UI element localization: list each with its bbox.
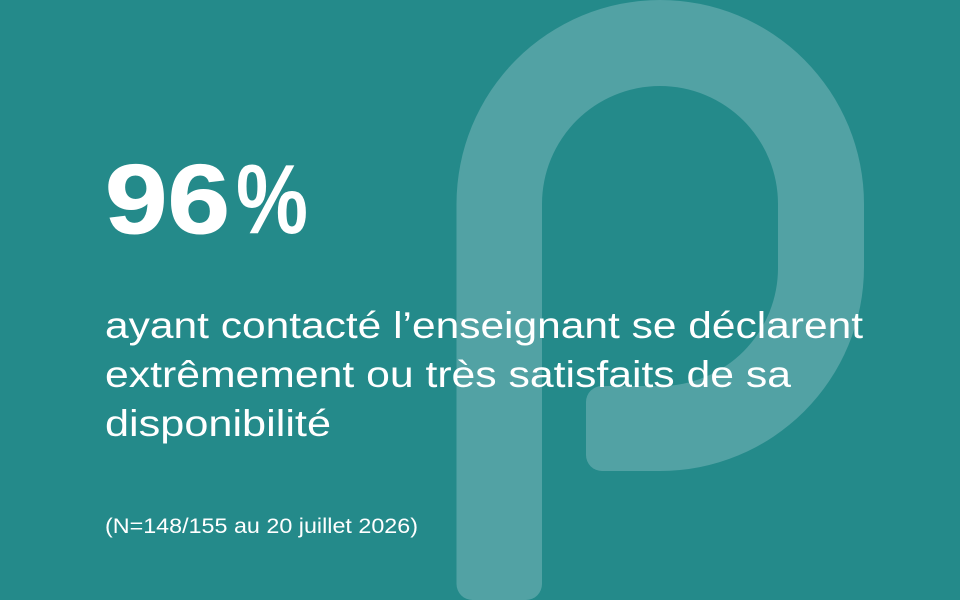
headline statistic: % [236,144,308,254]
description text block: ayant contacté l’enseignant se déclarent [105,304,864,346]
headline statistic [105,144,308,254]
headline statistic: 96 [105,144,230,254]
footnote: sample size and date: (N=148/155 au 20 juillet 2026) [105,515,418,538]
description text block: extrêmement ou très satisfaits de sa [105,353,791,395]
description text block [105,304,864,444]
description text block: disponibilité [105,402,331,444]
icon: large stylised letter P watermark [456,0,864,600]
